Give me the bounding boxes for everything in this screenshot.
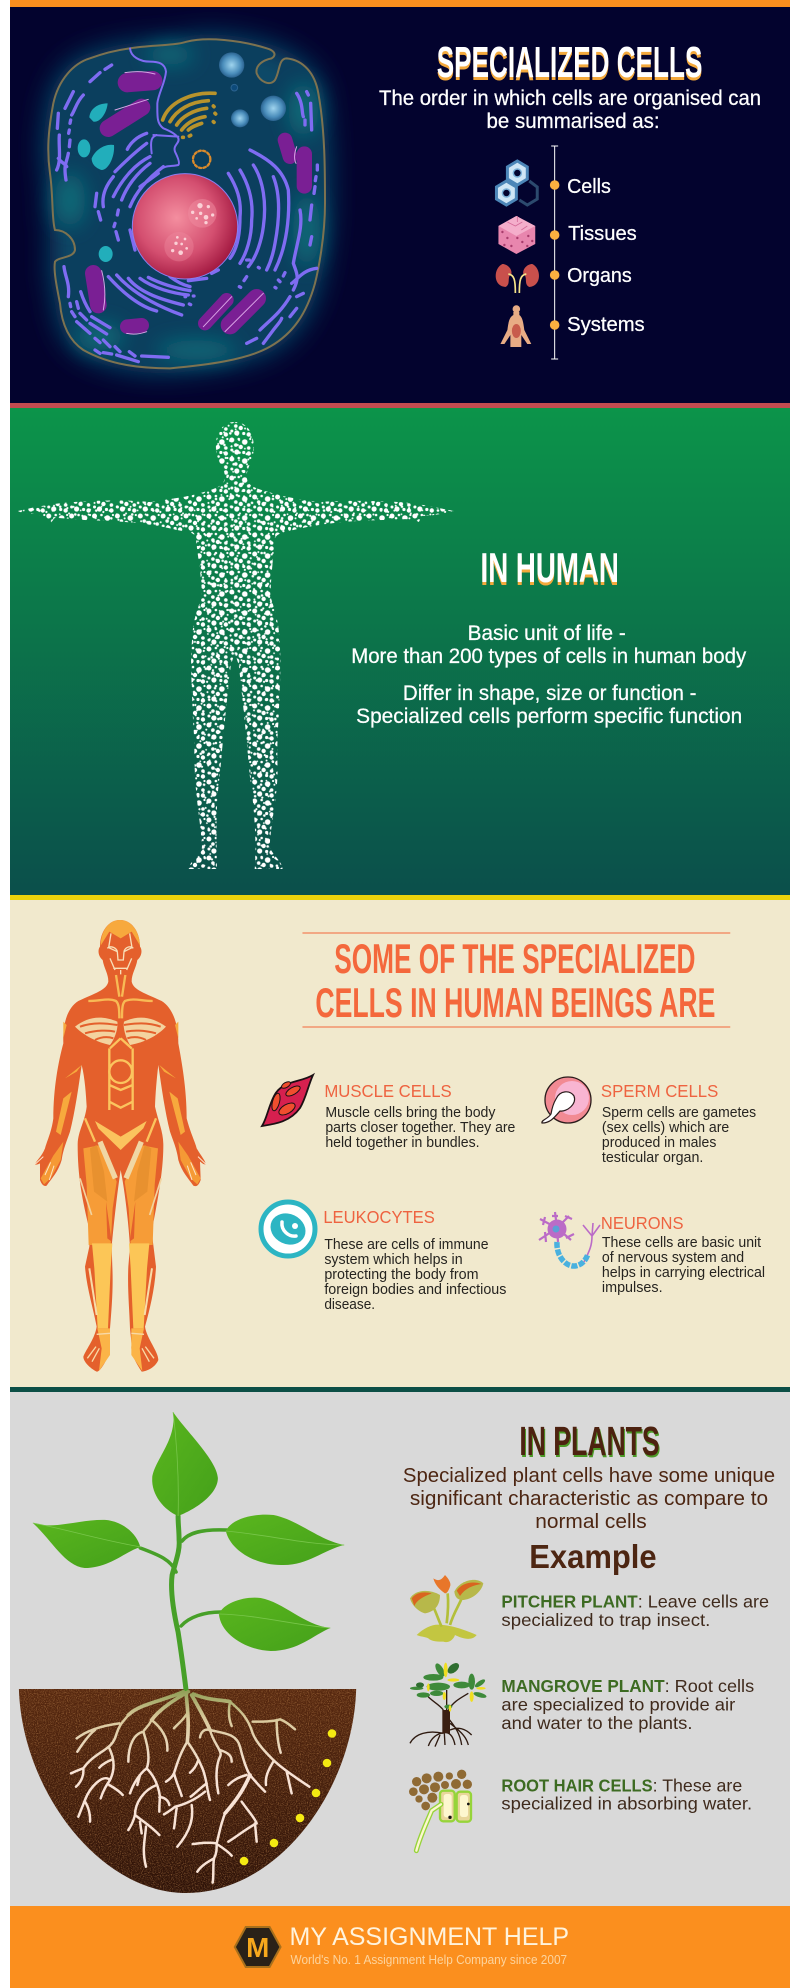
- text: human cell facts: [351, 622, 747, 728]
- item: mangrove plant: MANGROVE PLANT: [501, 1676, 665, 1696]
- vacuoles: [78, 103, 114, 262]
- illustration: human body made of cells: [18, 422, 454, 869]
- item: pitcher plant: : Leave cells are: [638, 1591, 769, 1612]
- timeline of organisation levels: Cells: [567, 176, 611, 198]
- abdominal frame: [109, 1038, 133, 1110]
- intro text: be summarised as:: [487, 110, 660, 133]
- footer text: [290, 1923, 569, 1967]
- text: plant intro: Specialized plant cells have some unique: [403, 1465, 775, 1487]
- golgi: [163, 93, 216, 168]
- item: neurons: NEURONS: [601, 1213, 684, 1233]
- hands: [41, 1142, 63, 1184]
- arm highlights: [63, 1022, 178, 1038]
- vesicles: [219, 52, 286, 127]
- text: plant intro: significant characteristic as compare to: [410, 1488, 768, 1510]
- heading: in human: [481, 544, 619, 594]
- soil: [19, 1689, 356, 1893]
- feet: [97, 1328, 110, 1371]
- item: neurons: helps in carrying electrical: [602, 1265, 765, 1281]
- heading: example: Example: [529, 1538, 657, 1575]
- item: neurons: of nervous system and: [602, 1250, 744, 1266]
- footer logo: M: [246, 1932, 269, 1963]
- item: muscle cells: held together in bundles.: [325, 1135, 480, 1151]
- nucleus: [132, 174, 238, 279]
- item: mangrove plant: : Root cells: [665, 1676, 754, 1696]
- item: muscle cells: Muscle cells bring the body: [325, 1105, 496, 1121]
- timeline of organisation levels: Organs: [567, 265, 632, 287]
- heading: in plants: IN PLANTS: [520, 1420, 661, 1466]
- item: mangrove plant: are specialized to provide air: [501, 1695, 735, 1715]
- text: human cell facts: Basic unit of life -: [468, 622, 626, 645]
- illustration: muscular human figure: [35, 920, 206, 1372]
- timeline of organisation levels: Systems: [567, 314, 645, 336]
- icon: pitcher plant: [410, 1575, 483, 1642]
- illustration: animal cell: [48, 39, 325, 368]
- heading: in plants: [519, 1418, 661, 1466]
- item: muscle cells: parts closer together. They are: [325, 1120, 515, 1136]
- item: sperm cells: produced in males: [602, 1135, 716, 1151]
- mitochondria: [93, 81, 304, 327]
- leaves: [33, 1412, 344, 1651]
- footer logo: [235, 1927, 281, 1967]
- timeline of organisation levels: Tissues: [568, 223, 637, 245]
- item: leukocytes: [323, 1207, 506, 1313]
- item: pitcher plant: specialized to trap insect.: [501, 1610, 710, 1630]
- heading: some of the specialized cells: [302, 933, 730, 1027]
- thighs: [83, 1145, 117, 1245]
- item: leukocytes: protecting the body from: [324, 1267, 479, 1283]
- item: sperm cells: [601, 1081, 756, 1166]
- illustration: plant with roots: [19, 1412, 356, 1893]
- icon: organs: [496, 264, 539, 293]
- heading: in plants: IN PLANTS: [519, 1418, 660, 1464]
- text: plant intro: normal cells: [535, 1511, 647, 1533]
- icon: leukocyte: [261, 1202, 315, 1256]
- cytoplasm glow: [55, 45, 320, 360]
- heading: in human: IN HUMAN: [481, 544, 619, 591]
- text: human cell facts: Differ in shape, size or function -: [403, 682, 696, 705]
- text: human cell facts: More than 200 types of cells in human body: [351, 645, 747, 668]
- roots: [71, 1692, 309, 1883]
- footer text: MY ASSIGNMENT HELP: [290, 1923, 569, 1951]
- heading: in human: IN HUMAN: [481, 547, 619, 594]
- item: leukocytes: disease.: [324, 1297, 375, 1313]
- head details: [101, 920, 140, 946]
- item: pitcher plant: PITCHER PLANT: [501, 1591, 638, 1612]
- item: neurons: impulses.: [602, 1280, 663, 1296]
- item: root hair cells: [501, 1776, 752, 1814]
- item: sperm cells: (sex cells) which are: [602, 1120, 729, 1136]
- icon: mangrove plant: [410, 1661, 487, 1747]
- item: leukocytes: LEUKOCYTES: [323, 1207, 435, 1227]
- item: root hair cells: : These are: [653, 1776, 742, 1796]
- icon: root hair cells: [409, 1770, 472, 1851]
- icon: sperm cell: [542, 1077, 591, 1123]
- item: mangrove plant: and water to the plants.: [501, 1713, 692, 1733]
- footer text: World's No. 1 Assignment Help Company since 2007: [291, 1953, 567, 1967]
- nutrient dots: [240, 1729, 336, 1865]
- stem: [140, 1516, 227, 1690]
- item: neurons: These cells are basic unit: [602, 1235, 761, 1251]
- text: human cell facts: Specialized cells perform specific function: [356, 705, 742, 728]
- text: plant intro: [403, 1465, 775, 1533]
- endoplasmic reticulum: [57, 48, 317, 362]
- item: sperm cells: Sperm cells are gametes: [602, 1105, 756, 1121]
- item: leukocytes: These are cells of immune: [324, 1237, 488, 1253]
- pectoral fans: [75, 1018, 118, 1045]
- intro text: [379, 87, 761, 133]
- icon: systems: [500, 305, 531, 347]
- item: pitcher plant: [501, 1591, 769, 1630]
- knees and shins: [92, 1243, 112, 1328]
- item: neurons: [601, 1213, 765, 1296]
- item: leukocytes: system which helps in: [324, 1252, 463, 1268]
- icon: muscle cell: [262, 1075, 313, 1126]
- item: mangrove plant: [501, 1676, 754, 1733]
- item: muscle cells: [324, 1081, 515, 1151]
- icon: neuron: [539, 1212, 600, 1266]
- intro text: The order in which cells are organised can: [379, 87, 761, 110]
- item: root hair cells: ROOT HAIR CELLS: [501, 1776, 653, 1796]
- item: muscle cells: MUSCLE CELLS: [324, 1081, 452, 1101]
- icon: tissues: [498, 216, 535, 254]
- timeline of organisation levels: [550, 146, 645, 359]
- item: sperm cells: SPERM CELLS: [601, 1081, 718, 1101]
- item: leukocytes: foreign bodies and infectious: [324, 1282, 506, 1298]
- icon: cells: [496, 161, 537, 205]
- item: root hair cells: specialized in absorbing water.: [501, 1793, 752, 1814]
- item: sperm cells: testicular organ.: [602, 1150, 703, 1166]
